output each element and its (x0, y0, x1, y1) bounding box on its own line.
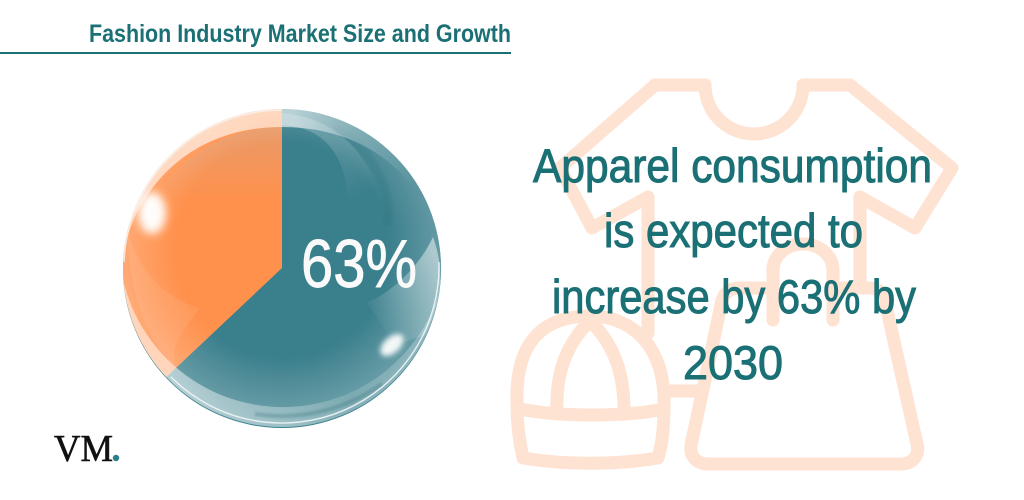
title underline (0, 52, 511, 54)
glass: upper right dark arc (335, 128, 389, 225)
glass: edge glow (122, 108, 442, 428)
icon: cap (517, 316, 664, 463)
statement text: Apparel consumption (533, 139, 932, 192)
glass: bottom crescent (123, 236, 441, 427)
glass: bottom dark arc (255, 384, 382, 416)
title: Fashion Industry Market Size and Growth (89, 20, 511, 48)
glass: lower right crescent (367, 237, 440, 345)
icon: t-shirt (560, 85, 952, 391)
glass: soft arc on orange (128, 235, 200, 368)
glass: inner top shading on orange (171, 127, 282, 178)
pie slice: orange 37% (123, 109, 282, 377)
specular highlight: left (138, 192, 166, 234)
logo: VM.: VM (54, 428, 113, 470)
statement text: is expected to (604, 204, 863, 257)
glass: upper right band (282, 113, 370, 184)
logo dot (113, 455, 119, 461)
statement text: increase by 63% by (552, 270, 916, 323)
statement text (533, 139, 932, 389)
glass: top crescent (124, 109, 404, 250)
glass: bottom rim highlight (171, 262, 439, 423)
icon group: clothing outlines (517, 85, 952, 464)
statement text: 2030 (683, 336, 783, 389)
glass: left rim line (124, 110, 282, 262)
pie value label: 63% (301, 226, 417, 302)
specular highlight: lower right (376, 330, 408, 360)
pie slice: teal 63% (282, 109, 441, 314)
rim shadow (123, 110, 441, 428)
chart: glass sphere pie (123, 109, 441, 428)
icon: dress (691, 244, 918, 464)
